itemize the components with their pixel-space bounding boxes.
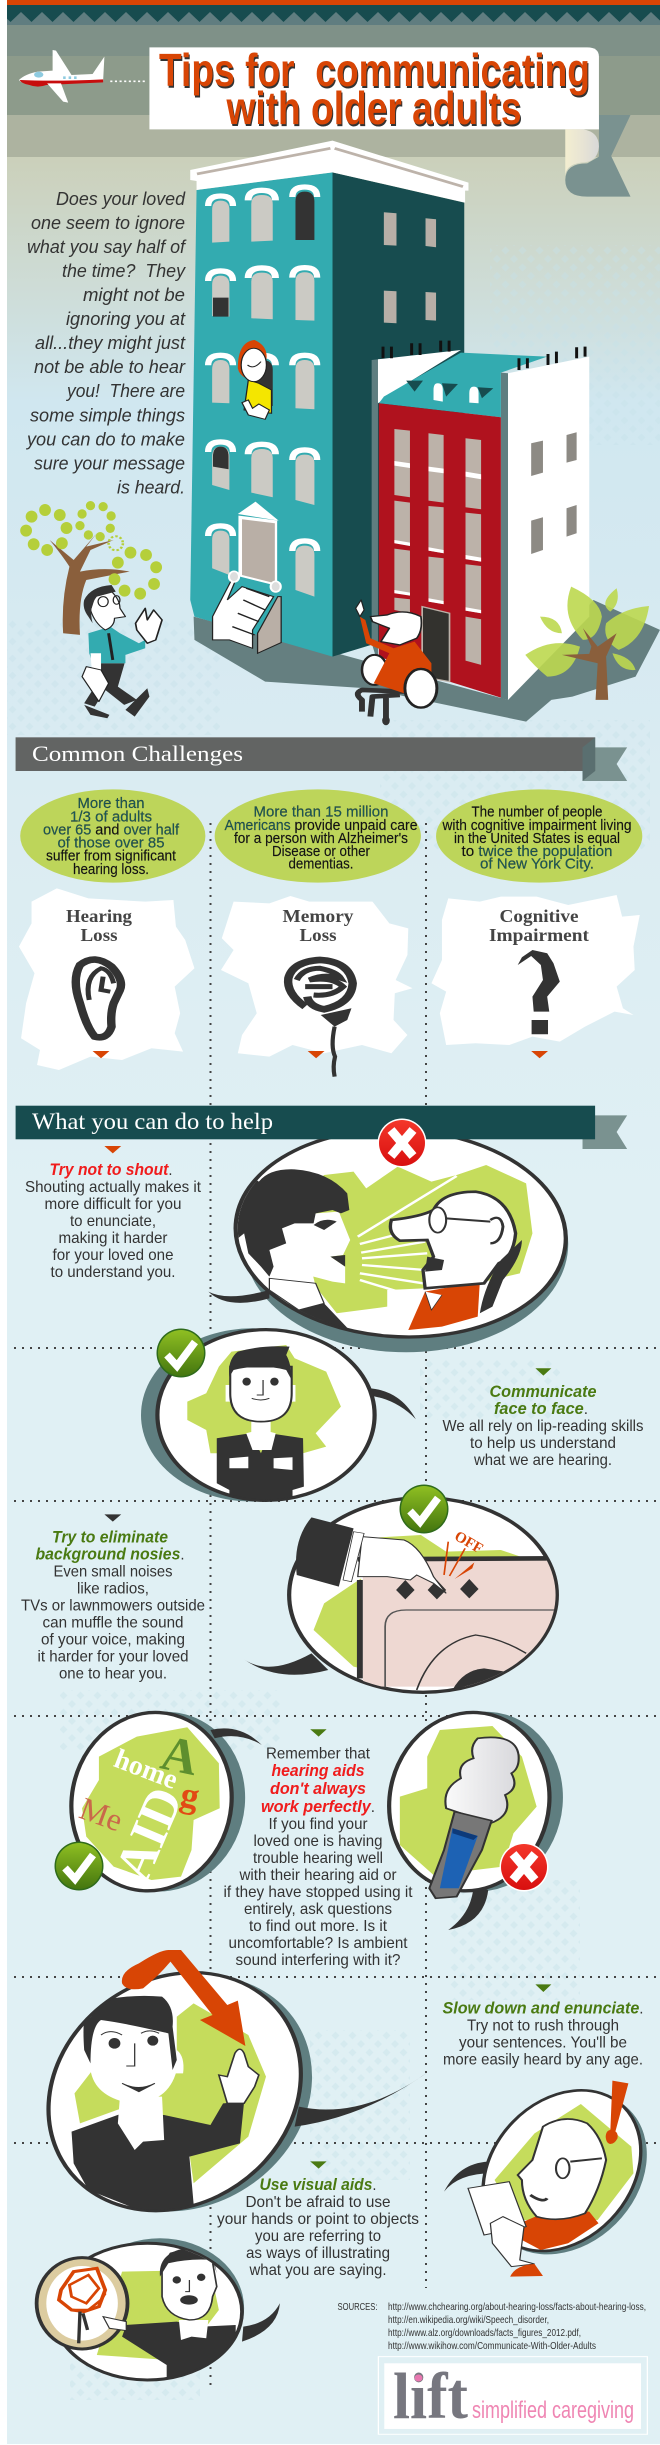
tip: background noises: like radios,: [77, 1581, 149, 1598]
heading ribbon teal: [583, 1115, 627, 1149]
words collage: [75, 1724, 203, 1889]
intro text: the time? They: [62, 260, 187, 281]
stat 2 text: Americans provide unpaid care: [224, 818, 418, 834]
stat 3 text: in the United States is equal: [454, 831, 620, 847]
arrow orange: [122, 1950, 245, 2046]
ribbon behind title: [565, 115, 631, 197]
tip: hearing aids: to find out more. Is it: [249, 1918, 388, 1935]
words collage: Me: [75, 1790, 128, 1838]
tip: visual aids: Use visual aids.: [260, 2175, 376, 2194]
walking man: [82, 585, 162, 718]
orange marker: [104, 1146, 121, 1153]
tip: hearing aids: If you find your: [268, 1816, 368, 1833]
illustration: face to face: [141, 1328, 416, 1502]
tip: visual aids: [217, 2175, 419, 2279]
intro text: ignoring you at: [66, 308, 186, 329]
green marker: [535, 1368, 551, 1376]
tip: background noises: of your voice, making: [41, 1632, 185, 1649]
tip: visual aids: as ways of illustrating: [246, 2245, 390, 2262]
stat 2 text: dementias.: [288, 857, 354, 873]
tip: hearing aids: work perfectly.: [261, 1797, 375, 1816]
tip: try not to shout: for your loved one: [52, 1247, 174, 1264]
stat 1 text: of those over 85: [58, 836, 164, 852]
tip: visual aids: you are referring to: [255, 2228, 381, 2245]
what you can do heading: What you can do to help: [32, 1109, 273, 1134]
stoop door and stairs: [213, 502, 281, 653]
heading bar grey: [16, 737, 595, 771]
challenge labels: Loss: [300, 925, 336, 945]
sources: SOURCES:: [338, 2301, 378, 2313]
illustration: off button: [244, 1498, 560, 1693]
heading ribbon grey: [583, 747, 627, 781]
tip: try not to shout: Try not to shout.: [50, 1160, 173, 1179]
stat 3 text: [442, 805, 632, 873]
side windows: [384, 212, 436, 323]
intro text: might not be: [83, 284, 185, 305]
panel: help section graphics middle: [64, 1498, 570, 1930]
tip: try not to shout: Shouting actually makes it: [25, 1179, 202, 1196]
challenge labels: Memory: [282, 906, 354, 926]
sources: http://www.wikihow.com/Communicate-With-Older-Adults: [388, 2340, 596, 2352]
tip: hearing aids: uncomfortable? Is ambient: [228, 1935, 408, 1952]
logo panel: [384, 2363, 641, 2429]
small tree right: [525, 587, 649, 700]
dotted grid lines: [14, 823, 660, 2387]
left tree with circular leaves: [20, 501, 162, 635]
icon: ear: [76, 960, 121, 1037]
intro text: what you say half of: [27, 236, 187, 257]
large teal building: [190, 141, 468, 657]
off label: OFF: [452, 1528, 485, 1557]
words collage: home: [110, 1743, 182, 1796]
title: with older adults: [226, 82, 522, 134]
tip: slow down: Try not to rush through: [467, 2017, 619, 2034]
stat 2 text: for a person with Alzheimer's: [234, 831, 408, 847]
tip: try not to shout: to understand you.: [50, 1264, 176, 1281]
icon: question mark: [518, 950, 560, 1034]
tip: hearing aids: don't always: [270, 1779, 366, 1798]
tip: slow down: [442, 1998, 644, 2068]
stat 1 text: over 65 and over half: [43, 822, 180, 838]
tip: slow down: your sentences. You'll be: [459, 2034, 627, 2051]
words collage: A: [157, 1724, 203, 1786]
tip: background noises: it harder for your loved: [38, 1649, 188, 1666]
intro text: Does your loved: [56, 188, 186, 209]
tip: try not to shout: [25, 1160, 202, 1281]
tip: communicate face to face: what we are hearing.: [473, 1452, 612, 1469]
intro text: some simple things: [30, 405, 185, 426]
front windows: [212, 192, 314, 597]
badge: check face: [156, 1328, 206, 1378]
challenge labels: Cognitive: [500, 906, 579, 926]
logo frame: [378, 2357, 647, 2434]
tip: communicate face to face: to help us understand: [470, 1435, 616, 1452]
illustration: words speech bubble: [64, 1707, 262, 1896]
exclamation mark: [606, 2081, 628, 2144]
title banner scroll: [149, 47, 599, 129]
woman in window: [238, 340, 271, 419]
green ellipse 2: [215, 789, 421, 883]
intro text: sure your message: [34, 452, 185, 473]
tip: background noises: background nosies.: [36, 1545, 184, 1564]
tip: hearing aids: with their hearing aid or: [239, 1867, 397, 1884]
tip: background noises: can muffle the sound: [42, 1615, 184, 1632]
green marker: [310, 1729, 327, 1737]
illustration: rose pointing: [37, 2238, 280, 2387]
panel: common challenges graphics: [16, 737, 642, 1077]
orange markers: [93, 1051, 548, 1058]
intro text: one seem to ignore: [31, 212, 185, 233]
challenge labels: Hearing: [66, 906, 132, 926]
intro text: is heard.: [117, 476, 185, 497]
stat 1 text: [43, 796, 180, 878]
tip: hearing aids: trouble hearing well: [253, 1850, 383, 1867]
illustration: glasses man: [444, 2072, 660, 2277]
illustration: hearing aid: [382, 1707, 570, 1930]
tip: hearing aids: loved one is having: [254, 1833, 382, 1850]
panel: help section graphics bottom: [7, 1944, 660, 2434]
tip: communicate face to face: face to face.: [494, 1399, 588, 1418]
tip: background noises: one to hear you.: [59, 1666, 167, 1683]
stat 2 text: More than 15 million: [254, 805, 388, 821]
tip: hearing aids: if they have stopped using it: [224, 1884, 413, 1901]
badge: check off button: [400, 1484, 448, 1534]
dotted flight path: [110, 79, 147, 84]
stat 1 text: hearing loss.: [73, 862, 149, 878]
challenge labels: [66, 906, 589, 945]
badge: check words: [54, 1842, 104, 1890]
top stripes: [0, 0, 660, 157]
words collage: g: [177, 1774, 203, 1817]
illustration: pointing man: [46, 1950, 426, 2212]
tip: hearing aids: [224, 1745, 413, 1969]
badge: x shouting: [378, 1118, 426, 1168]
green markers: [310, 1984, 551, 2169]
sources: http://en.wikipedia.org/wiki/Speech_disorder,: [388, 2314, 549, 2326]
common challenges heading: Common Challenges: [32, 741, 243, 766]
red building: [372, 341, 589, 700]
stat 2 text: Disease or other: [272, 844, 370, 860]
tip: slow down: more easily heard by any age.: [443, 2051, 643, 2068]
tip: try not to shout: making it harder: [58, 1230, 168, 1247]
sources: http://www.alz.org/downloads/facts_figures_2012.pdf,: [388, 2327, 581, 2339]
challenge labels: Loss: [80, 925, 118, 945]
tip: visual aids: Don't be afraid to use: [246, 2194, 391, 2211]
tip: hearing aids: sound interfering with it?: [236, 1952, 401, 1969]
tip: communicate face to face: [442, 1382, 644, 1469]
logo text: lift: [393, 2360, 468, 2433]
stat 1 text: 1/3 of adults: [70, 810, 152, 826]
sources: [338, 2301, 646, 2352]
logo text: [393, 2360, 634, 2433]
illustration: shouting: [208, 1139, 568, 1352]
stat 3 text: of New York City.: [480, 857, 594, 873]
intro text: [25, 188, 187, 497]
intro text: you! There are: [65, 380, 185, 401]
tip: background noises: Try to eliminate: [52, 1528, 168, 1547]
tip: visual aids: your hands or point to objects: [217, 2211, 419, 2228]
man in wheelchair: [356, 600, 437, 725]
tip: hearing aids: entirely, ask questions: [244, 1901, 392, 1918]
tip: hearing aids: hearing aids: [272, 1761, 364, 1780]
stat 1 text: More than: [78, 796, 144, 812]
blob hearing: [19, 888, 194, 1070]
tip: try not to shout: to enunciate,: [70, 1213, 156, 1230]
title: with older adults: [227, 84, 522, 136]
tip: background noises: Even small noises: [54, 1564, 172, 1581]
dark marker: [104, 1514, 121, 1522]
blob memory: [221, 896, 412, 1057]
badge: x hearing aid: [500, 1842, 548, 1892]
title: [159, 44, 591, 136]
tip: slow down: Slow down and enunciate.: [442, 1998, 644, 2017]
stat 1 text: suffer from significant: [46, 849, 176, 865]
words collage: AID: [105, 1779, 194, 1889]
intro text: all...they might just: [35, 332, 186, 353]
intro text: you can do to make: [25, 429, 185, 450]
tip: try not to shout: more difficult for you: [44, 1196, 182, 1213]
stat 3 text: The number of people: [472, 805, 602, 821]
green ellipse 3: [436, 789, 642, 883]
heading bar teal: [16, 1106, 595, 1139]
icon: plane: [19, 50, 104, 103]
stat 2 text: [224, 805, 418, 873]
stat 3 text: to twice the population: [462, 844, 612, 860]
green ellipse 1: [20, 789, 205, 883]
ground shadow: [194, 600, 660, 722]
tip: background noises: [21, 1528, 205, 1683]
challenge labels: Impairment: [489, 925, 589, 945]
tip: communicate face to face: We all rely on lip-reading skills: [442, 1418, 644, 1435]
blob cognitive: [431, 895, 640, 1045]
tip: hearing aids: Remember that: [266, 1745, 371, 1762]
panel: help section graphics top: [104, 1115, 627, 1533]
tip: visual aids: what you are saying.: [249, 2262, 386, 2279]
tip: background noises: TVs or lawnmowers outside: [21, 1598, 205, 1615]
stat 3 text: with cognitive impairment living: [442, 818, 632, 834]
title and building scene: [19, 47, 660, 725]
icon: brain: [288, 960, 353, 1077]
intro text: not be able to hear: [34, 356, 186, 377]
scroll curl: [565, 129, 599, 177]
tip: communicate face to face: Communicate: [490, 1382, 596, 1401]
